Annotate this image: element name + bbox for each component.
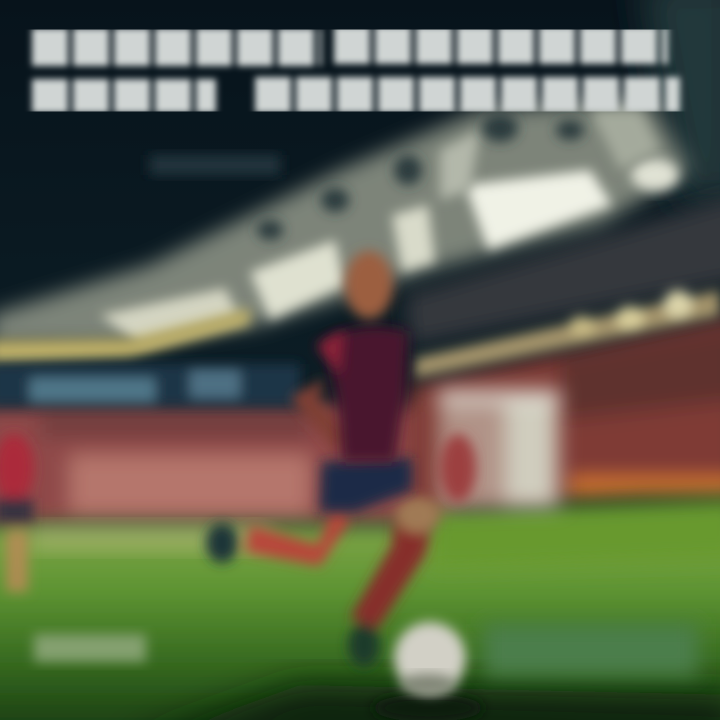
back leg (206, 505, 350, 566)
torso jersey (325, 327, 408, 462)
bottom-left caption (illegible in reference) (34, 634, 146, 662)
yellow lights band (0, 290, 720, 378)
green pitch (0, 498, 720, 720)
front leg (348, 497, 440, 667)
bright stadium roof (0, 100, 690, 345)
head and hair (345, 251, 393, 319)
football (373, 622, 483, 720)
background player left (0, 434, 34, 592)
title (illegible in reference) (32, 45, 680, 96)
blue lower stand band (0, 364, 300, 406)
red crowd stands (0, 315, 720, 525)
grey roof band on right (405, 195, 720, 345)
subtitle (illegible in reference) (150, 155, 280, 175)
shorts (320, 458, 412, 512)
background player right (440, 434, 476, 502)
goal frame (438, 390, 560, 507)
main player (206, 251, 440, 667)
bottom-right caption (illegible in reference) (484, 624, 698, 676)
arm (290, 378, 356, 450)
